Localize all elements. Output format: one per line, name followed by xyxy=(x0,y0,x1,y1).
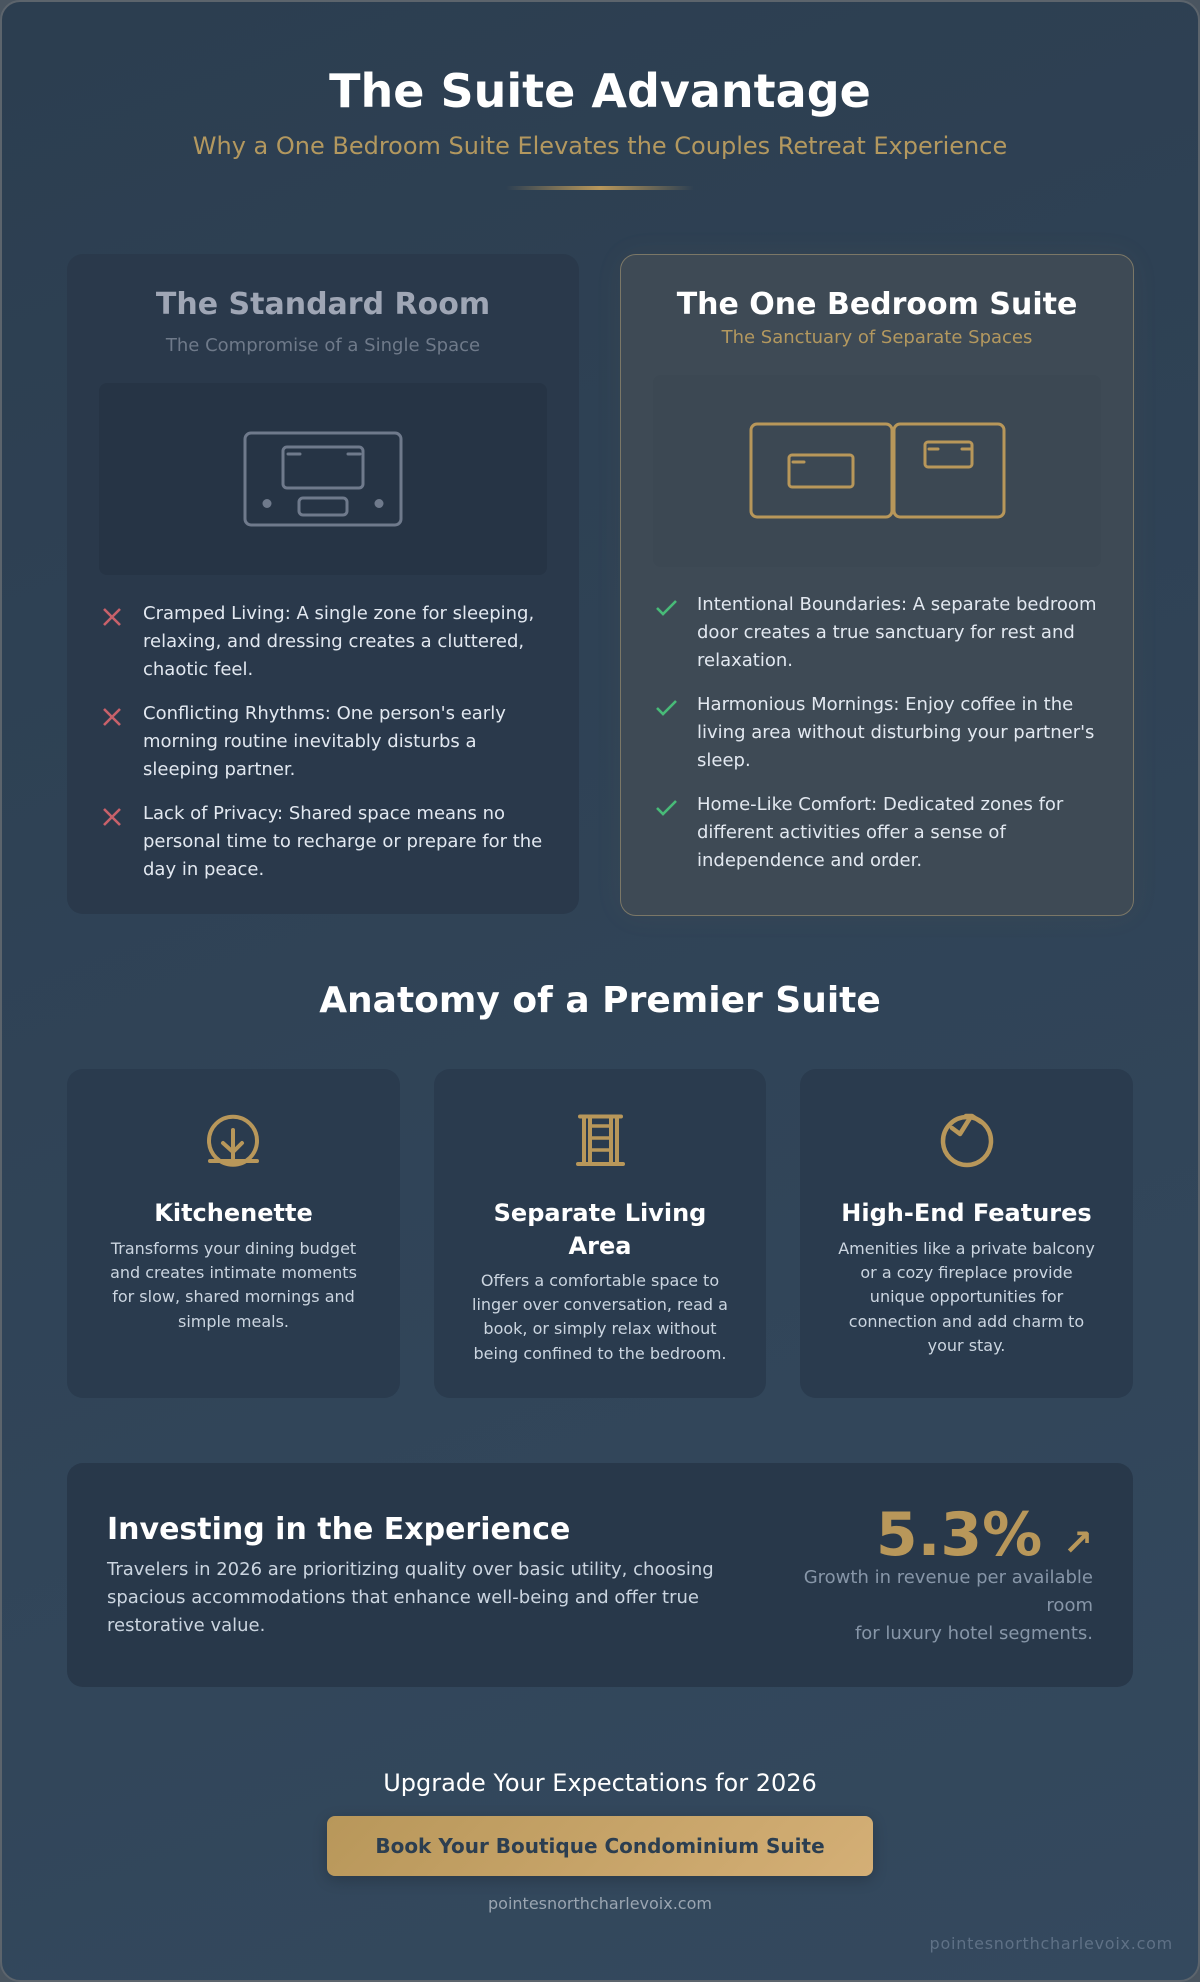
icon: separate living area xyxy=(576,1114,625,1166)
heading: kitchenette: Kitchenette xyxy=(154,1199,313,1227)
text: statistic caption: for luxury hotel segments. xyxy=(855,1622,1093,1644)
text: investing: Travelers in 2026 are prioritizing quality over basic utility, choosing xyxy=(107,1559,714,1580)
header divider xyxy=(506,186,694,190)
drawback: lack of privacy xyxy=(103,803,542,880)
text: high-end features: connection and add charm to xyxy=(849,1312,1084,1331)
text: investing xyxy=(106,1559,714,1636)
text: separate living area: book, or simply relax without xyxy=(483,1319,717,1338)
text: kitchenette: Transforms your dining budget xyxy=(111,1239,356,1258)
text: lack of privacy: day in peace. xyxy=(143,859,264,880)
text: cramped living xyxy=(143,603,534,680)
icon: cross xyxy=(103,708,121,726)
heading: one bedroom suite: The One Bedroom Suite xyxy=(677,287,1077,322)
text: home-like comfort: Home-Like Comfort: Dedicated zones for xyxy=(697,794,1063,815)
heading: standard room: The Standard Room xyxy=(156,287,490,322)
website link: pointesnorthcharlevoix.com xyxy=(488,1894,712,1913)
subheading: one bedroom suite: The Sanctuary of Separate Spaces xyxy=(722,327,1032,348)
text: kitchenette: simple meals. xyxy=(178,1312,289,1331)
text: home-like comfort xyxy=(697,794,1064,871)
text: lack of privacy: personal time to recharge or prepare for the xyxy=(143,831,542,852)
text: cramped living: relaxing, and dressing creates a cluttered, xyxy=(143,631,524,652)
text: harmonious mornings: sleep. xyxy=(697,750,751,771)
text: high-end features: your stay. xyxy=(928,1336,1005,1355)
statistic: 5.3% growth: 5.3% ↗ xyxy=(876,1500,1093,1570)
panel: separate living area xyxy=(434,1069,766,1398)
text: kitchenette: for slow, shared mornings and xyxy=(112,1287,355,1306)
text: home-like comfort: different activities offer a sense of xyxy=(697,822,1006,843)
text: kitchenette xyxy=(110,1239,357,1331)
panel: kitchenette xyxy=(67,1069,400,1398)
icon: high-end features xyxy=(940,1114,994,1168)
benefit: harmonious mornings xyxy=(656,694,1094,771)
drawback: cramped living xyxy=(103,603,534,680)
text: intentional boundaries: Intentional Boundaries: A separate bedroom xyxy=(697,594,1096,615)
subheading: standard room: The Compromise of a Single Space xyxy=(166,335,480,356)
text: conflicting rhythms xyxy=(143,703,506,780)
text: high-end features: or a cozy fireplace provide xyxy=(860,1263,1073,1282)
icon: kitchenette xyxy=(207,1114,259,1167)
text: harmonious mornings xyxy=(697,694,1094,771)
button: book suite xyxy=(327,1816,873,1876)
illustration: single room floor plan xyxy=(99,383,547,575)
heading: separate living area: Separate Living xyxy=(494,1199,706,1227)
icon: check xyxy=(656,600,677,616)
text: intentional boundaries: door creates a true sanctuary for rest and xyxy=(697,622,1075,643)
drawback: conflicting rhythms xyxy=(103,703,506,780)
text: cramped living: chaotic feel. xyxy=(143,659,253,680)
icon: cross xyxy=(103,608,121,626)
title: The Suite Advantage xyxy=(329,64,871,118)
text: conflicting rhythms: sleeping partner. xyxy=(143,759,295,780)
benefit: intentional boundaries xyxy=(656,594,1096,671)
call to action text: Upgrade Your Expectations for 2026 xyxy=(383,1769,817,1797)
text: investing: restorative value. xyxy=(107,1615,265,1636)
text: separate living area xyxy=(472,1271,728,1363)
heading: investing: Investing in the Experience xyxy=(107,1512,570,1547)
benefit: home-like comfort xyxy=(656,794,1064,871)
text: home-like comfort: independence and order. xyxy=(697,850,922,871)
heading: high-end features: High-End Features xyxy=(841,1199,1092,1227)
text: harmonious mornings: living area without disturbing your partner's xyxy=(697,722,1094,743)
panel: one bedroom suite xyxy=(620,254,1134,916)
panel: investing in the experience xyxy=(67,1463,1133,1687)
text: separate living area: being confined to the bedroom. xyxy=(474,1344,726,1363)
subtitle: Why a One Bedroom Suite Elevates the Couples Retreat Experience xyxy=(193,132,1007,160)
text: high-end features: Amenities like a private balcony xyxy=(838,1239,1095,1258)
text: kitchenette: and creates intimate moments xyxy=(110,1263,357,1282)
text: intentional boundaries: relaxation. xyxy=(697,650,793,671)
text: investing: spacious accommodations that enhance well-being and offer true xyxy=(107,1587,699,1608)
heading: separate living area xyxy=(494,1199,706,1260)
illustration: two room floor plan xyxy=(653,375,1101,567)
icon: check xyxy=(656,700,677,716)
icon: cross xyxy=(103,808,121,826)
text: high-end features: unique opportunities for xyxy=(870,1287,1063,1306)
list: drawbacks xyxy=(103,603,542,880)
panel: standard room xyxy=(67,254,579,914)
text: intentional boundaries xyxy=(697,594,1096,671)
text: harmonious mornings: Harmonious Mornings: Enjoy coffee in the xyxy=(697,694,1073,715)
section heading: anatomy: Anatomy of a Premier Suite xyxy=(319,980,881,1021)
icon: check xyxy=(656,800,677,816)
text: statistic caption xyxy=(804,1566,1093,1644)
text: statistic caption: room xyxy=(1046,1594,1093,1616)
button: book suite: Book Your Boutique Condominium Suite xyxy=(375,1834,825,1858)
heading: separate living area: Area xyxy=(569,1232,631,1260)
text: cramped living: Cramped Living: A single zone for sleeping, xyxy=(143,603,534,624)
footer watermark: pointesnorthcharlevoix.com xyxy=(930,1934,1173,1953)
text: separate living area: linger over conversation, read a xyxy=(472,1295,728,1314)
text: separate living area: Offers a comfortable space to xyxy=(481,1271,719,1290)
text: conflicting rhythms: morning routine inevitably disturbs a xyxy=(143,731,477,752)
panel: high-end features xyxy=(800,1069,1133,1398)
list: benefits xyxy=(656,594,1096,871)
text: conflicting rhythms: Conflicting Rhythms: One person's early xyxy=(143,703,506,724)
text: high-end features xyxy=(838,1239,1095,1355)
text: lack of privacy: Lack of Privacy: Shared space means no xyxy=(143,803,505,824)
text: lack of privacy xyxy=(143,803,542,880)
text: statistic caption: Growth in revenue per available xyxy=(804,1566,1093,1588)
